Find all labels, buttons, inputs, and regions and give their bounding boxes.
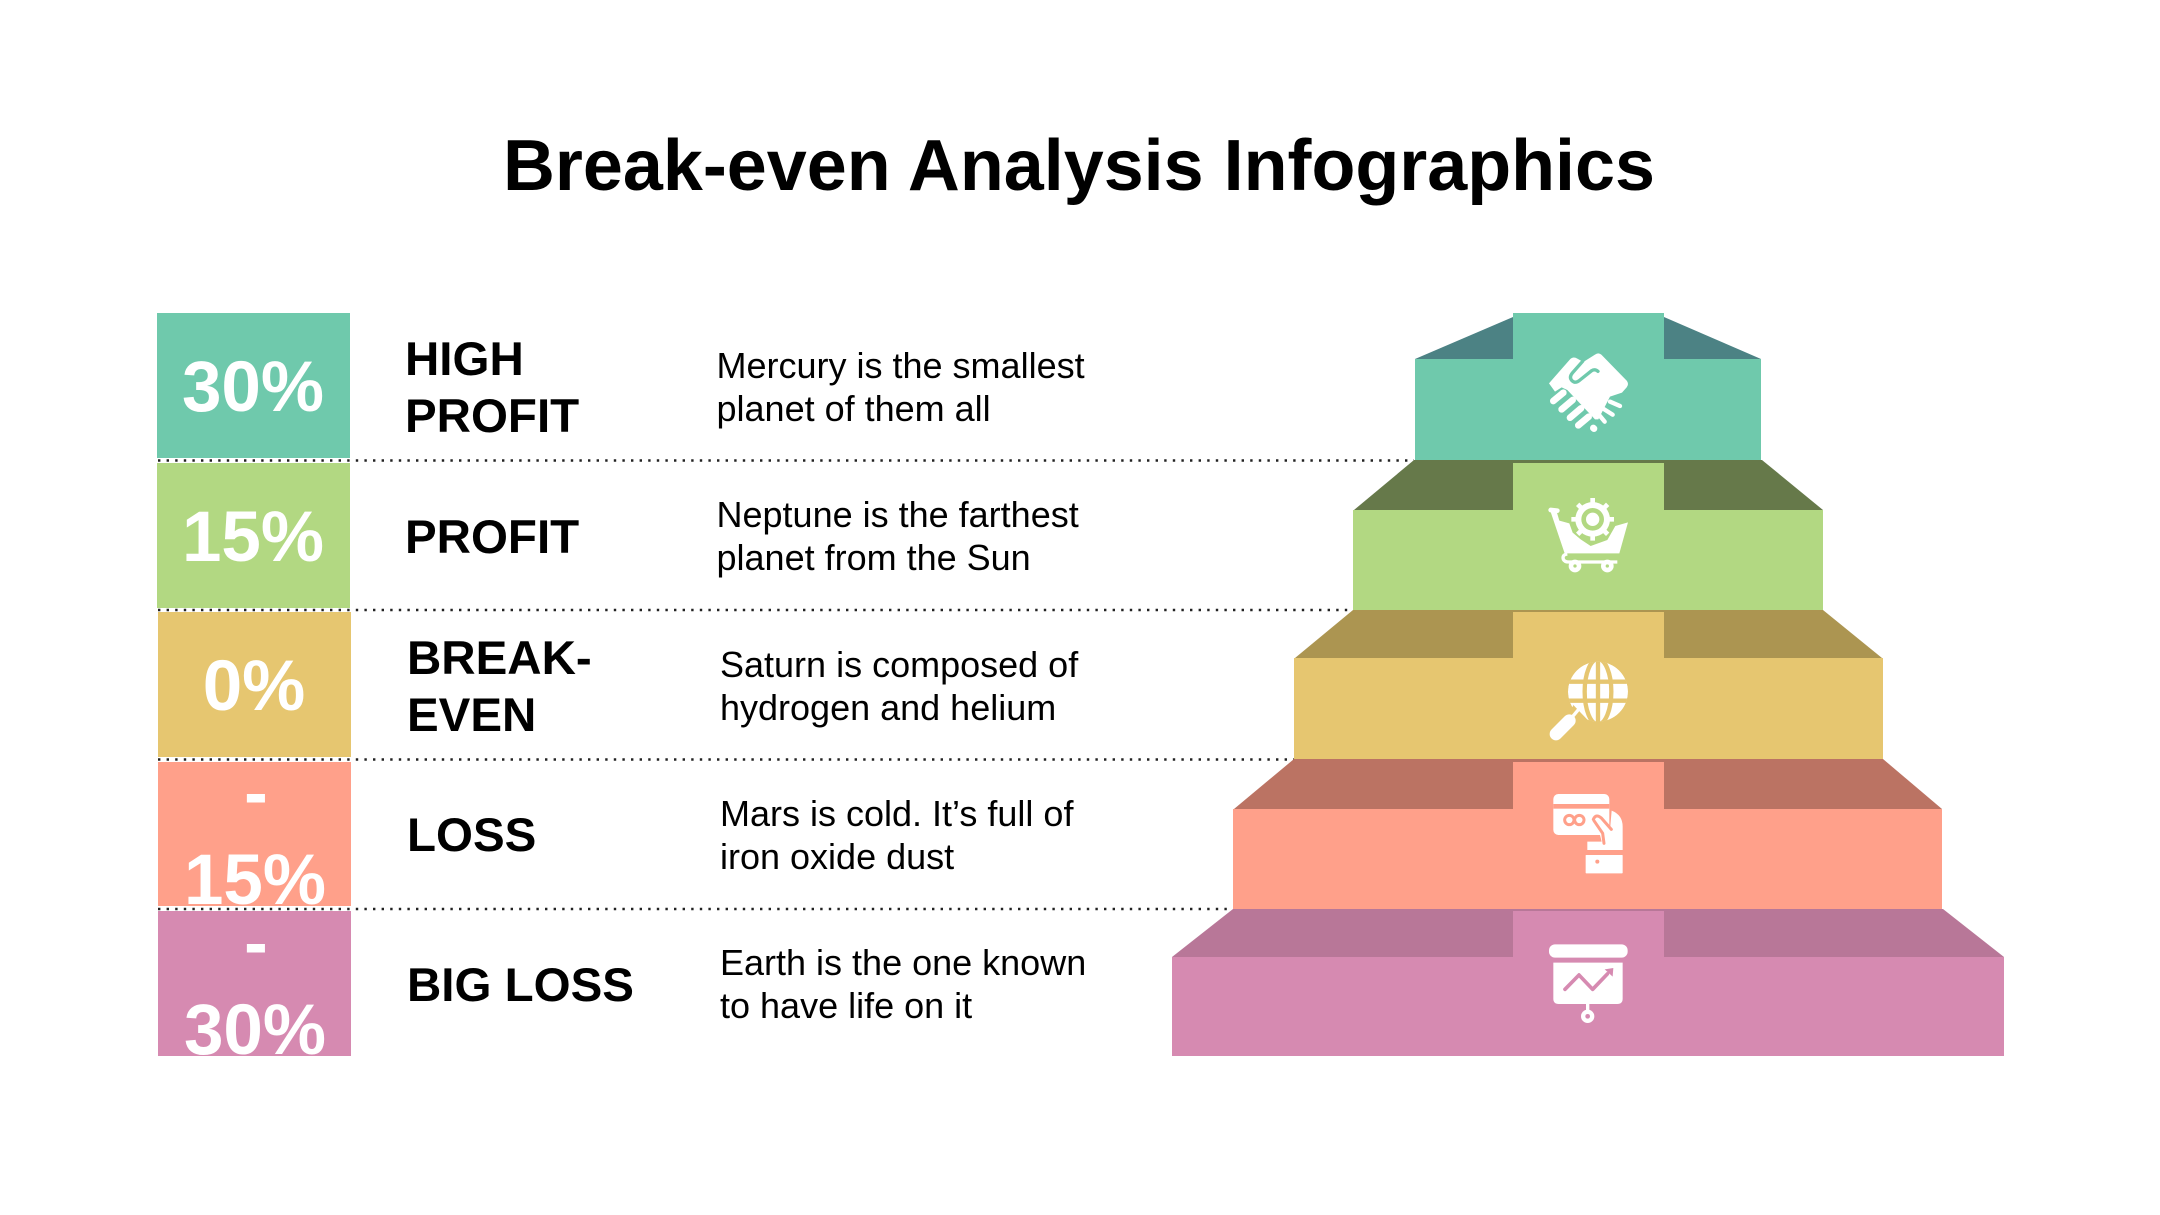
percent badge: -30%: 30% (184, 991, 326, 1070)
percent badge: 0% (158, 612, 351, 757)
percent badge: -15%: 15% (184, 841, 326, 920)
description: saturn: hydrogen and helium (720, 687, 1056, 728)
panel: break-even row (158, 612, 1079, 757)
label: break-even: EVEN (407, 689, 536, 742)
panel: profit row (157, 463, 1079, 608)
label: loss: LOSS (407, 809, 536, 862)
label: high profit: PROFIT (405, 390, 579, 443)
pyramid tier 1: high profit (1415, 313, 1761, 460)
icon: globe with magnifier (1556, 659, 1633, 734)
percent badge: 30%: 30% (182, 348, 324, 427)
icon: cart with gear (1550, 497, 1628, 572)
panel: high profit row (157, 313, 1085, 458)
description: earth: to have life on it (720, 985, 972, 1026)
pyramid tier 4: loss (1233, 759, 1942, 909)
pyramid tier 5: big loss (1172, 909, 2004, 1056)
description: neptune: planet from the Sun (716, 537, 1031, 578)
percent badge: 0%: 0% (203, 647, 305, 726)
percent badge: -30% (158, 911, 351, 1056)
title: Break-even Analysis Infographics (503, 126, 1655, 206)
percent badge: -15% (158, 762, 351, 906)
pyramid tier 3: break-even (1294, 610, 1883, 759)
description: mars: iron oxide dust (720, 836, 954, 877)
percent badge: -15%: - (244, 754, 268, 833)
panel: loss row (158, 754, 1074, 920)
pyramid tier 2: profit (1353, 460, 1823, 610)
description: mars: Mars is cold. It’s full of (720, 793, 1074, 834)
label: high profit: HIGH (405, 333, 524, 386)
description: saturn: Saturn is composed of (720, 644, 1079, 685)
percent badge: -30%: - (244, 904, 268, 983)
icon: presentation board (1549, 944, 1628, 1023)
percent badge: 15% (157, 463, 350, 608)
pyramid chart (1172, 313, 2004, 1056)
description: earth: Earth is the one known (720, 942, 1086, 983)
label: big loss: BIG LOSS (407, 959, 634, 1012)
icon: handshake (1549, 353, 1628, 429)
label: break-even: BREAK- (407, 632, 592, 685)
percent badge: 30% (157, 313, 350, 458)
percent badge: 15%: 15% (182, 498, 324, 577)
panel: big loss row (158, 911, 1084, 1056)
description: mercury: Mercury is the smallest (716, 345, 1085, 386)
description: mercury: planet of them all (716, 388, 991, 429)
icon: hand with credit card (1553, 794, 1623, 873)
label: profit: PROFIT (405, 511, 579, 564)
description: neptune: Neptune is the farthest (716, 494, 1079, 535)
